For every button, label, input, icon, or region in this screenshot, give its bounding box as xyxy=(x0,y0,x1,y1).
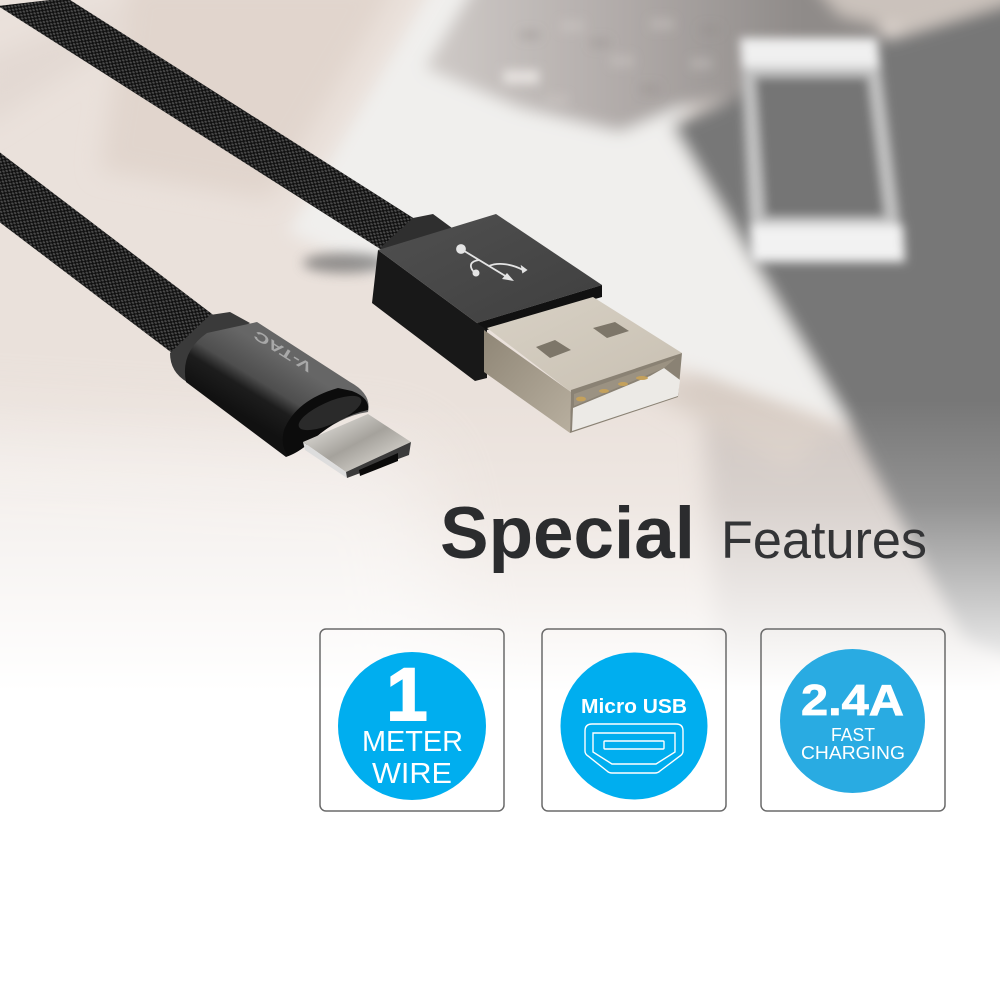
housing top xyxy=(378,214,602,323)
badge label: WIRE xyxy=(372,758,452,790)
brand mark: V-TAC xyxy=(250,327,315,375)
overmould face xyxy=(283,388,368,456)
metal plug xyxy=(303,414,411,472)
USB-A cable braid xyxy=(0,0,418,252)
title: Special Features: Features xyxy=(721,511,927,570)
badge circle xyxy=(338,652,486,800)
panel: 2.4A fast charging xyxy=(761,629,945,811)
strain relief xyxy=(170,312,250,382)
badge value: 2.4A xyxy=(801,676,904,725)
contact window holes xyxy=(536,340,571,358)
white fade toward the page foot xyxy=(0,400,1000,692)
icon: USB trident xyxy=(457,245,526,281)
badge label: METER xyxy=(362,726,463,758)
phone xyxy=(740,38,905,262)
badge label xyxy=(362,726,463,790)
micro USB connector xyxy=(170,312,411,478)
badge label xyxy=(801,725,905,763)
badge label: FAST xyxy=(831,725,875,745)
housing xyxy=(185,322,369,457)
panel: micro USB xyxy=(542,629,726,811)
badge number: 1 xyxy=(386,653,428,736)
title: Special Features: Special xyxy=(440,493,695,574)
laptop body xyxy=(288,0,850,425)
strain relief xyxy=(380,214,452,262)
micro USB cable braid xyxy=(0,151,216,356)
white wash on the left xyxy=(0,420,470,760)
metal shell xyxy=(487,297,682,392)
panel: 1 meter wire xyxy=(320,629,504,811)
cable shadow xyxy=(303,253,387,273)
badge circle xyxy=(560,652,708,800)
housing side xyxy=(372,250,487,381)
icon: micro USB port xyxy=(585,724,683,773)
USB-A connector xyxy=(372,214,682,433)
badge circle xyxy=(780,649,925,793)
badge label: CHARGING xyxy=(801,743,905,763)
keyboard xyxy=(425,0,885,132)
badge label: Micro USB xyxy=(581,696,687,718)
title: Special Features xyxy=(440,493,927,574)
keyboard keys xyxy=(503,18,720,105)
laptop screen xyxy=(672,0,1000,665)
